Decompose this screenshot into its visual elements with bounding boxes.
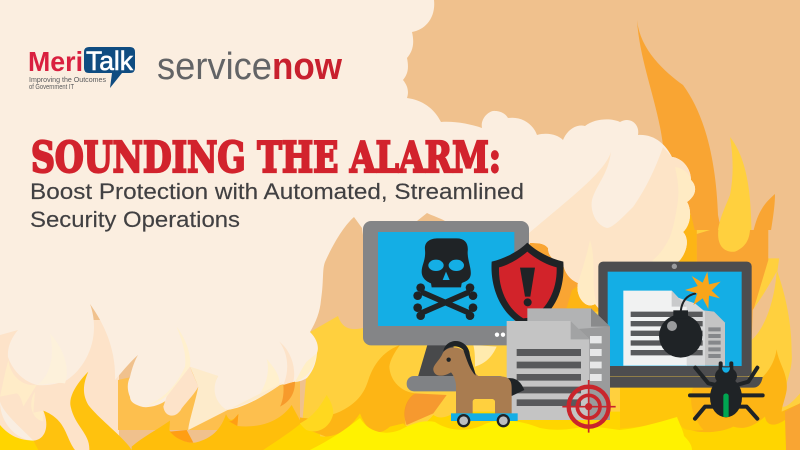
cloud of smoke background panel [0, 0, 695, 410]
horse body [433, 347, 512, 414]
wordmark Meri: Meri [28, 46, 83, 77]
MeriTalk logo [28, 46, 135, 91]
horse mane [443, 341, 476, 376]
monitor screen [378, 232, 514, 326]
speech bubble [84, 47, 135, 88]
laptop with bomb [598, 262, 763, 388]
bomb [659, 272, 721, 358]
laptop screen [608, 272, 742, 366]
camera [672, 264, 677, 269]
trojan horse on wheels [433, 341, 524, 427]
stacked documents [507, 308, 610, 420]
monitor with skull [363, 221, 529, 391]
monitor base [407, 376, 507, 391]
title: SOUNDING THE ALARM: [31, 133, 501, 182]
subtitle: Security Operations [30, 207, 240, 232]
front document lines [517, 349, 581, 406]
ServiceNow logo: service [157, 46, 272, 88]
bottom flames centre under monitor [300, 345, 620, 450]
bright yellow flame base [310, 417, 692, 450]
target crosshair [562, 380, 616, 433]
shield with exclamation mark [491, 243, 564, 322]
tagline: of Government IT [29, 84, 75, 91]
monitor stand [418, 345, 457, 377]
back flames right [520, 20, 775, 340]
cart [451, 413, 518, 421]
wheels [457, 414, 510, 427]
lower flame base [0, 310, 620, 450]
flames lower right [590, 230, 800, 450]
laptop base [603, 377, 763, 388]
ServiceNow logo: now [272, 46, 342, 88]
horse tail [507, 378, 524, 396]
laptop lid [598, 262, 752, 377]
tagline: Improving the Outcomes [29, 77, 106, 84]
back document lines [590, 336, 602, 381]
translucent flames over cloud [417, 147, 695, 340]
bottom flames left, peach and yellow tongues [0, 327, 320, 450]
ServiceNow logo [157, 46, 342, 88]
front document [507, 321, 589, 420]
documents on screen [623, 291, 725, 366]
monitor body [363, 221, 529, 345]
power dots [495, 332, 505, 337]
horse eye [446, 357, 451, 362]
back document [527, 308, 610, 420]
skull and crossbones [413, 238, 477, 320]
bug [690, 363, 763, 419]
wordmark Talk: Talk [86, 46, 133, 76]
subtitle: Boost Protection with Automated, Streamlined [30, 179, 524, 204]
